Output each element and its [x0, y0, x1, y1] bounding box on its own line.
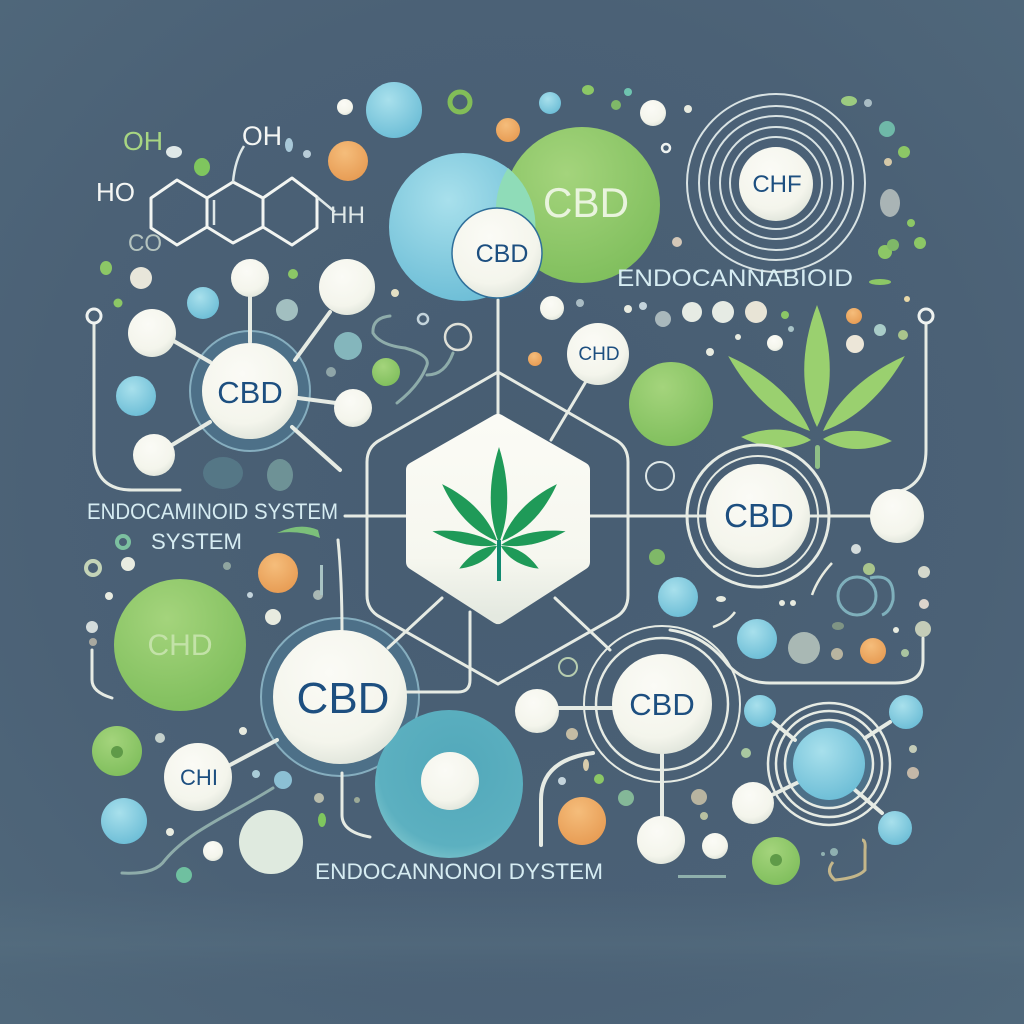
central hexagon	[414, 422, 582, 616]
panel: molecule structure	[96, 121, 365, 257]
node: CHI	[164, 743, 232, 811]
heading: endocannabinoid system	[87, 499, 338, 554]
node: CBD lower left	[273, 630, 407, 764]
heading: endocannabinoid system: SYSTEM	[151, 529, 242, 554]
heading: endocannabinoid system: ENDOCAMINOID SYSTEM	[87, 499, 338, 524]
node: CBD right: CBD	[724, 497, 794, 534]
heading: bottom system: ENDOCANNONOI DYSTEM	[315, 859, 603, 884]
teal circle	[375, 710, 523, 858]
label: CBD	[543, 179, 629, 226]
heading: endocannabioid: ENDOCANNABIOID	[617, 265, 853, 292]
small particles	[86, 85, 931, 883]
node: CBD right	[687, 445, 924, 587]
panel: left cluster	[100, 259, 400, 491]
small CHD node: CHD	[578, 344, 620, 365]
small CHD node	[567, 323, 629, 385]
node: CBD lower centre	[515, 626, 740, 864]
panel: top overlapping circles	[389, 127, 660, 301]
node: CHI: CHI	[180, 765, 218, 790]
molecule labels: CO	[128, 230, 162, 257]
node: CBD lower centre: CBD	[629, 687, 695, 722]
molecule labels: OH	[242, 121, 282, 151]
icon: cannabis leaf	[431, 447, 567, 581]
molecule labels: HH	[330, 202, 365, 229]
green circle CHD	[114, 579, 246, 711]
green circle CHD: CHD	[148, 629, 212, 662]
node: CBD lower left: CBD	[297, 674, 389, 723]
panel: left cluster: CBD	[217, 375, 283, 410]
ring halos	[190, 331, 873, 808]
molecule labels: OH	[123, 126, 163, 156]
molecule labels: HO	[96, 177, 135, 207]
panel: top right rings	[687, 94, 865, 272]
connector lines	[92, 296, 926, 873]
scattered spheres	[86, 82, 933, 885]
label: CBD	[476, 240, 528, 268]
green circle	[629, 362, 713, 446]
node: blue rings lower right	[732, 695, 923, 845]
node: white on teal	[421, 752, 479, 810]
molecule labels	[96, 121, 365, 257]
icon: green leaf right	[721, 305, 912, 469]
panel: top right rings: CHF	[752, 171, 802, 198]
